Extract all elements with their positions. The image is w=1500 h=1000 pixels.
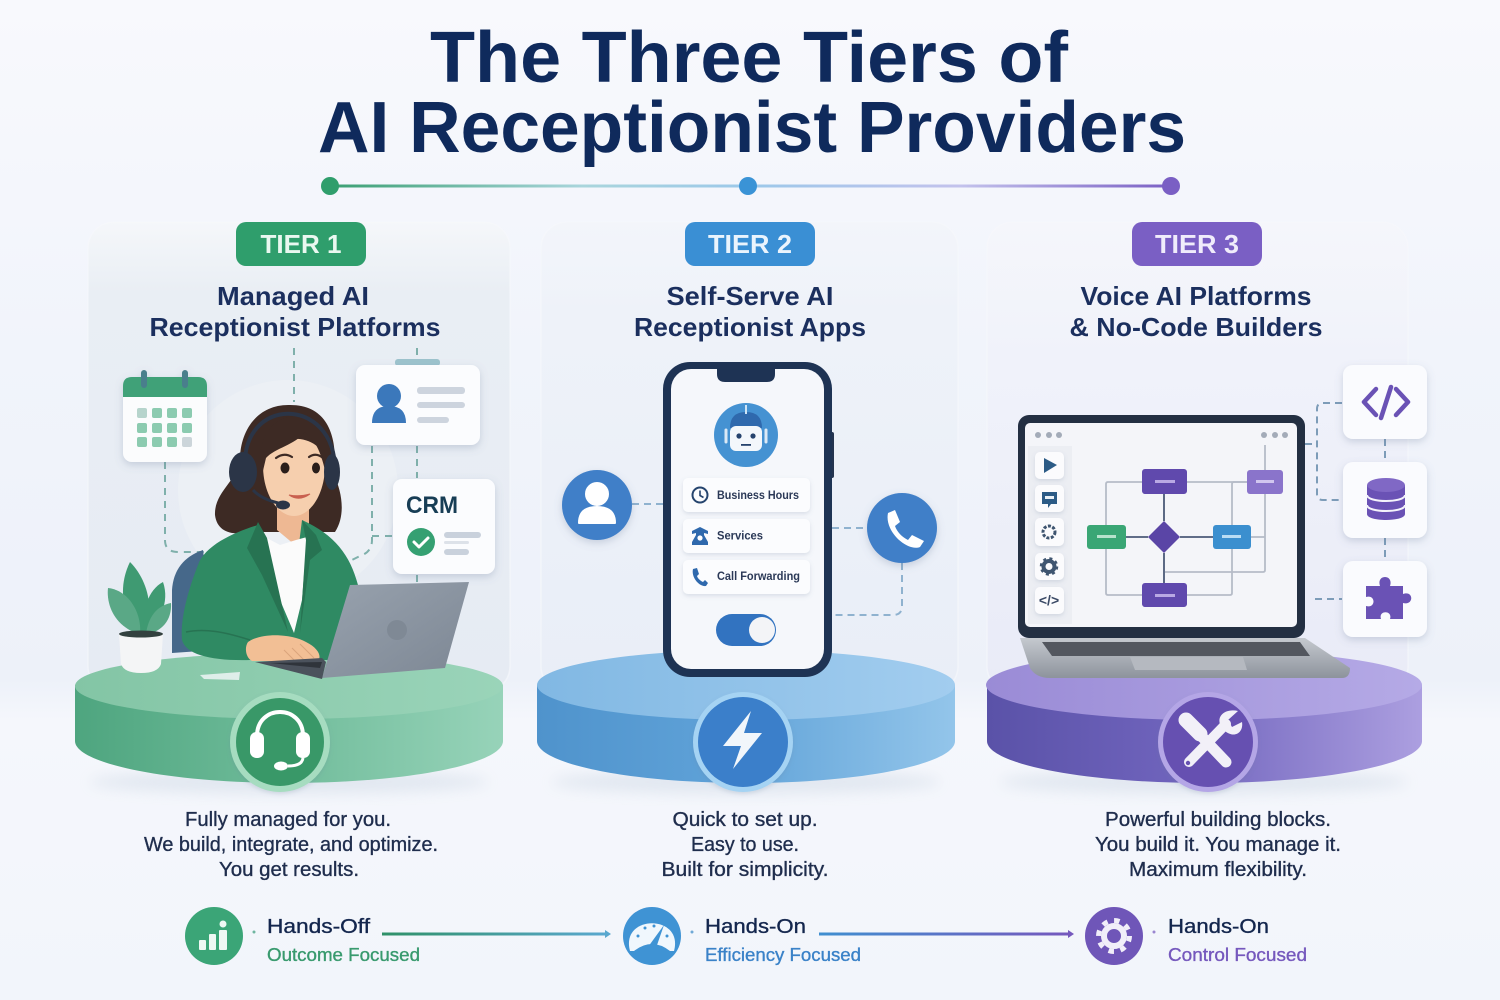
illustration: laptop xyxy=(255,582,469,679)
tier 1 heading: Managed AI xyxy=(217,281,369,311)
shirt xyxy=(265,537,307,633)
icon: headset badge xyxy=(230,692,330,792)
setting: services xyxy=(683,519,810,553)
icon: phone circle xyxy=(867,493,937,563)
laptop lid xyxy=(1018,415,1305,638)
title: AI Receptionist Providers xyxy=(318,88,1186,168)
icon: lightning badge xyxy=(693,692,793,792)
illustration: laptop with workflow xyxy=(1018,415,1350,678)
icon: person circle xyxy=(562,470,632,540)
back hair xyxy=(215,405,342,533)
tier 1 description: You get results. xyxy=(219,859,359,881)
setting: business hours xyxy=(683,478,810,512)
panel: tier 3 xyxy=(986,222,1427,881)
tier 2 description: Easy to use. xyxy=(691,834,799,856)
eyes brows mouth xyxy=(280,462,290,474)
icon: contact card xyxy=(356,359,480,445)
platform: blue xyxy=(537,650,955,794)
platform: green xyxy=(75,653,503,794)
illustration: smartphone xyxy=(663,362,834,677)
sidebar tools: </> xyxy=(1039,592,1059,608)
blazer xyxy=(182,520,358,660)
headset xyxy=(245,414,335,470)
panel background xyxy=(88,222,510,692)
arrow: tier 2 to tier 3 xyxy=(819,930,1074,938)
tier 1 description: We build, integrate, and optimize. xyxy=(144,834,438,856)
hand xyxy=(246,635,320,661)
icon: calendar xyxy=(123,370,207,462)
label xyxy=(1168,916,1307,965)
illustration: receptionist at laptop xyxy=(172,405,358,661)
tier 1 heading xyxy=(150,281,440,342)
bottom row: tier 2 focus xyxy=(623,907,861,965)
tier 1 heading: Receptionist Platforms xyxy=(150,312,440,342)
icon: robot avatar xyxy=(714,403,778,467)
panel: tier 2 xyxy=(537,222,958,881)
tier 3 description xyxy=(1095,809,1341,881)
tier 2 heading: Receptionist Apps xyxy=(634,312,866,342)
dashed connectors xyxy=(632,504,902,615)
chair xyxy=(172,550,215,653)
flowchart nodes xyxy=(1087,469,1283,607)
tier 3 description: Maximum flexibility. xyxy=(1129,859,1307,881)
label: Hands-Off xyxy=(267,916,371,938)
icon: puzzle tile xyxy=(1343,561,1427,637)
lapels xyxy=(247,522,288,632)
toggle switch xyxy=(716,614,776,646)
bottom row: tier 1 focus xyxy=(185,907,420,965)
tier 3 badge xyxy=(1132,222,1262,266)
icon: code tile xyxy=(1343,365,1427,439)
tier 2 heading xyxy=(634,281,866,342)
neck xyxy=(277,505,309,545)
setting: call forwarding: Call Forwarding xyxy=(717,571,800,583)
label: Control Focused xyxy=(1168,945,1307,965)
icon: database tile xyxy=(1343,462,1427,538)
tier 1 badge xyxy=(236,222,366,266)
notch xyxy=(717,369,775,382)
label xyxy=(705,916,861,965)
sidebar tools xyxy=(1035,452,1064,614)
panel background xyxy=(541,222,958,692)
tier 2 description: Built for simplicity. xyxy=(662,859,828,881)
icon: gauge xyxy=(623,907,681,965)
sleeve crease xyxy=(186,630,250,640)
tier 3 badge: TIER 3 xyxy=(1155,229,1239,259)
title divider with three tier dots xyxy=(321,177,1180,195)
panel: tier 1 xyxy=(75,222,510,881)
setting: call forwarding xyxy=(683,560,810,594)
platform: purple xyxy=(986,650,1422,794)
tier 3 heading xyxy=(1070,281,1322,342)
tier 1 description xyxy=(144,809,438,881)
bottom row: tier 3 focus xyxy=(1085,907,1307,965)
setting: business hours: Business Hours xyxy=(717,490,799,502)
icon: gear xyxy=(1085,907,1143,965)
dashed connectors xyxy=(165,348,417,584)
icon: plant xyxy=(108,562,171,673)
label: Hands-On xyxy=(705,916,806,938)
label xyxy=(267,916,420,965)
label: Efficiency Focused xyxy=(705,945,861,965)
panel background xyxy=(987,222,1408,692)
icon: CRM card: CRM xyxy=(406,492,458,519)
flowchart lines xyxy=(1106,445,1265,595)
pen on desk xyxy=(200,672,240,680)
icon: CRM card xyxy=(393,479,495,574)
tier 3 heading: & No-Code Builders xyxy=(1070,312,1322,342)
fringe xyxy=(260,416,329,475)
tier 3 heading: Voice AI Platforms xyxy=(1080,281,1312,311)
tier 2 heading: Self-Serve AI xyxy=(666,281,834,311)
tier 2 badge: TIER 2 xyxy=(708,229,792,259)
icon: tools badge xyxy=(1158,692,1258,792)
dashed connectors xyxy=(1305,403,1385,599)
window dots xyxy=(1035,432,1288,438)
title: The Three Tiers of xyxy=(430,18,1069,98)
sidebar xyxy=(1028,446,1072,624)
icon: growth chart xyxy=(185,907,243,965)
tier 2 badge xyxy=(685,222,815,266)
setting: services: Services xyxy=(717,530,763,542)
title xyxy=(318,18,1186,168)
tier 3 description: You build it. You manage it. xyxy=(1095,834,1341,856)
tier 2 description: Quick to set up. xyxy=(672,809,818,831)
tier 3 description: Powerful building blocks. xyxy=(1105,809,1331,831)
laptop base xyxy=(1020,638,1350,678)
soft halo behind agent xyxy=(178,380,398,600)
tier 2 description xyxy=(662,809,828,881)
label: Outcome Focused xyxy=(267,945,420,965)
tier 1 description: Fully managed for you. xyxy=(185,809,391,831)
face xyxy=(263,439,325,516)
tier 1 badge: TIER 1 xyxy=(260,229,342,259)
arrow: tier 1 to tier 2 xyxy=(382,930,611,938)
label: Hands-On xyxy=(1168,916,1269,938)
